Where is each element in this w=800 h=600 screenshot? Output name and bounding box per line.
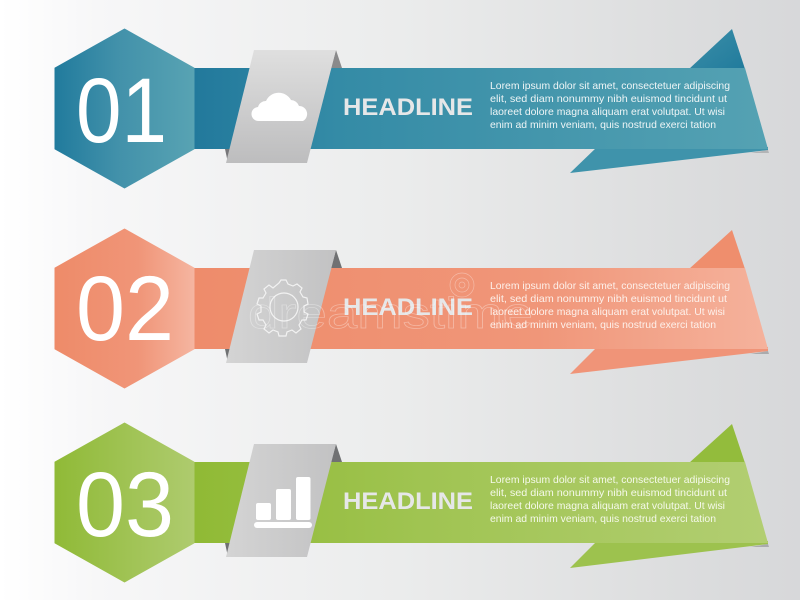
headline 3: HEADLINE (343, 488, 473, 515)
ribbon fold flaps (570, 424, 769, 568)
body text 3: elit, sed diam nonummy nibh euismod tincidunt ut (490, 487, 727, 499)
body text 3: Lorem ipsum dolor sit amet, consectetuer adipiscing (490, 474, 730, 486)
body text 1 (490, 80, 730, 131)
body text 1: Lorem ipsum dolor sit amet, consectetuer adipiscing (490, 80, 730, 92)
icon: cloud (251, 93, 307, 121)
body text 2: Lorem ipsum dolor sit amet, consectetuer adipiscing (490, 280, 730, 292)
hexagon 02: 02 (76, 258, 174, 360)
body text 2: laoreet dolore magna aliquam erat volutpat. Ut wisi (490, 306, 725, 318)
body text 2 (490, 280, 730, 331)
body text 3 (490, 474, 730, 525)
body text 1: elit, sed diam nonummy nibh euismod tincidunt ut (490, 93, 727, 105)
ribbon fold flaps (570, 29, 769, 173)
ribbon band (194, 462, 768, 543)
ribbon band (194, 68, 768, 149)
row 1: blue banner (55, 29, 769, 188)
body text 2: enim ad minim veniam, quis nostrud exerci tation (490, 319, 716, 331)
ribbon band (194, 268, 768, 349)
icon: gear (257, 280, 308, 336)
gray fold tab (225, 250, 342, 363)
body text 1: laoreet dolore magna aliquam erat volutpat. Ut wisi (490, 106, 725, 118)
headline 1: HEADLINE (343, 94, 473, 121)
row 3: green banner (55, 423, 769, 582)
hexagon 01: 01 (76, 60, 167, 162)
body text 3: laoreet dolore magna aliquam erat volutpat. Ut wisi (490, 500, 725, 512)
ribbon fold flaps (570, 230, 769, 374)
hexagon 03: 03 (76, 454, 174, 556)
icon: bar chart (254, 477, 312, 528)
stock watermark (248, 273, 533, 338)
headline 2: HEADLINE (343, 294, 473, 321)
row 2: orange banner (55, 229, 769, 388)
hexagon 02 (55, 229, 194, 388)
stock watermark: dreamstime (248, 289, 533, 338)
gray fold tab (225, 50, 342, 163)
body text 3: enim ad minim veniam, quis nostrud exerci tation (490, 513, 716, 525)
hexagon 03 (55, 423, 194, 582)
body text 2: elit, sed diam nonummy nibh euismod tincidunt ut (490, 293, 727, 305)
hexagon 01 (55, 29, 194, 188)
body text 1: enim ad minim veniam, quis nostrud exerci tation (490, 119, 716, 131)
gray fold tab (225, 444, 342, 557)
